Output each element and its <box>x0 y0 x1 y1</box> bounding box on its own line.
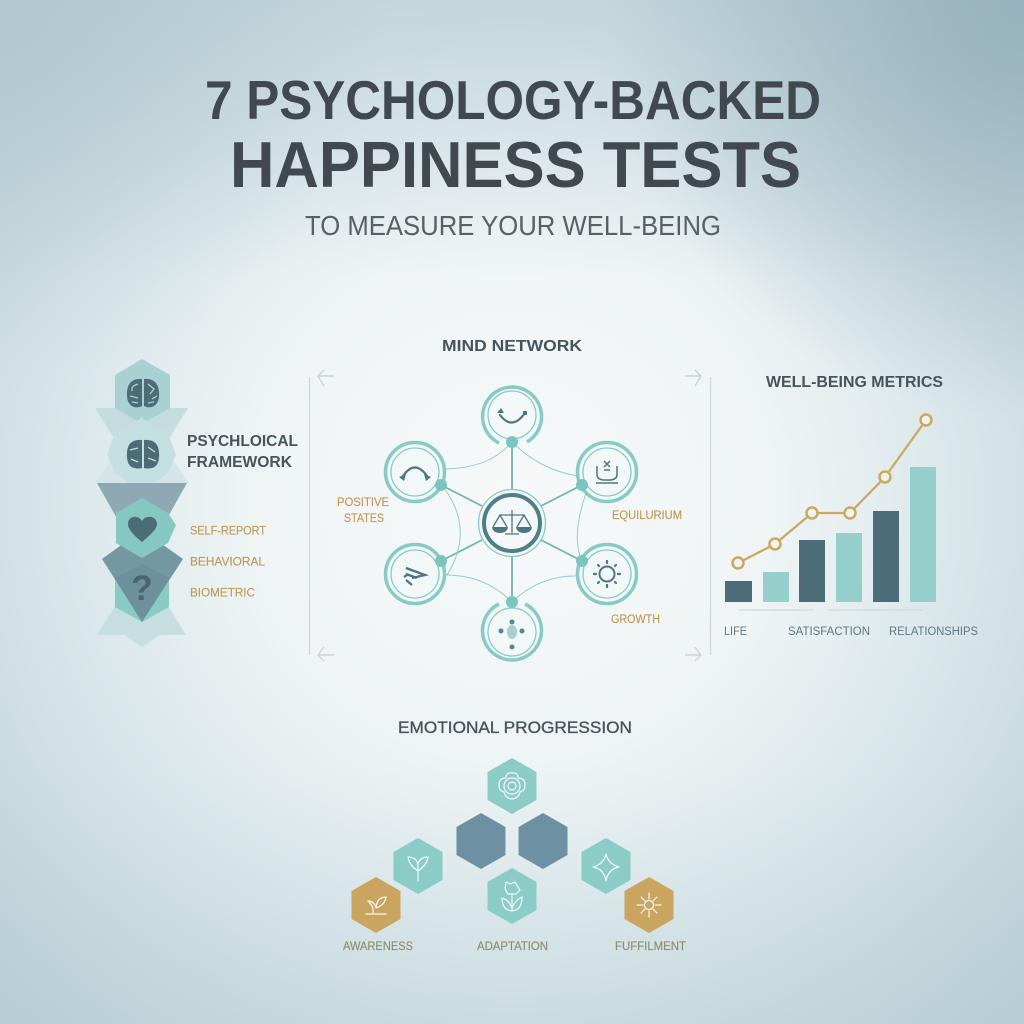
bar chart <box>725 467 936 610</box>
bottom triangle <box>97 563 186 647</box>
label: awareness: AWARENESS <box>343 939 413 953</box>
node: bottom, molecule <box>482 604 542 660</box>
teal lower hexagon <box>115 575 169 622</box>
label: self-report: SELF-REPORT <box>190 526 266 538</box>
label: positive states: STATES <box>344 513 384 525</box>
panel: mind network <box>310 338 710 661</box>
top hexagon with brain <box>115 359 170 424</box>
heading: emotional progression: EMOTIONAL PROGRESSION <box>398 718 632 737</box>
node: lower left, arrow <box>386 544 444 604</box>
junction dots <box>435 436 588 608</box>
heading: psychological framework: PSYCHLOICAL <box>187 433 298 450</box>
line chart <box>732 414 932 568</box>
label: biometric: BIOMETRIC <box>190 588 255 600</box>
third hexagon with heart <box>116 498 176 558</box>
panel: emotional progression <box>343 718 687 953</box>
label: growth: GROWTH <box>611 614 660 626</box>
title: 7 PSYCHOLOGY-BACKED <box>205 69 821 131</box>
center node: scales <box>478 490 546 556</box>
hexagon: sparkle <box>582 838 630 894</box>
heading line two: FRAMEWORK <box>187 454 292 471</box>
axis labels: SATISFACTION <box>788 626 870 638</box>
frame lines and corner arrows <box>310 370 710 661</box>
hexagon: gold sun <box>624 877 674 933</box>
heading: well-being metrics: WELL-BEING METRICS <box>766 374 943 391</box>
axis labels: RELATIONSHIPS <box>889 626 978 638</box>
panel: well-being metrics <box>724 374 978 638</box>
title: HAPPINESS TESTS <box>230 128 801 201</box>
diamond with question mark <box>102 530 183 622</box>
heading: mind network: MIND NETWORK <box>442 338 582 355</box>
diamond with question mark: ? <box>131 569 153 608</box>
hexagon: dark right <box>518 813 568 869</box>
hexagon: gold seedling <box>352 877 400 933</box>
axis labels <box>724 626 978 638</box>
label: positive states: POSITIVE <box>337 497 389 509</box>
connectors <box>441 442 588 602</box>
title <box>205 69 821 201</box>
hexagon: flower top <box>488 758 536 814</box>
label: adaptation: ADAPTATION <box>477 939 548 953</box>
label: positive states <box>337 497 389 525</box>
node: upper right, balance <box>578 442 636 502</box>
second hexagon with brain <box>107 418 176 492</box>
hexagon: dark left <box>456 813 506 869</box>
node: lower right, sun <box>578 544 636 604</box>
hexagon: flower <box>488 868 536 924</box>
label: fulfilment: FUFFILMENT <box>615 939 687 953</box>
label: behavioral: BEHAVIORAL <box>190 556 266 568</box>
node: top, smile <box>483 387 542 443</box>
hexagon: sprout <box>394 838 442 894</box>
subtitle: TO MEASURE YOUR WELL-BEING <box>305 210 721 241</box>
node: upper left, arc <box>386 442 444 502</box>
icon stack <box>95 359 189 647</box>
label: equilibrium: EQUILURIUM <box>612 510 682 522</box>
panel: psychological framework <box>95 359 298 647</box>
axis labels: LIFE <box>724 626 747 638</box>
